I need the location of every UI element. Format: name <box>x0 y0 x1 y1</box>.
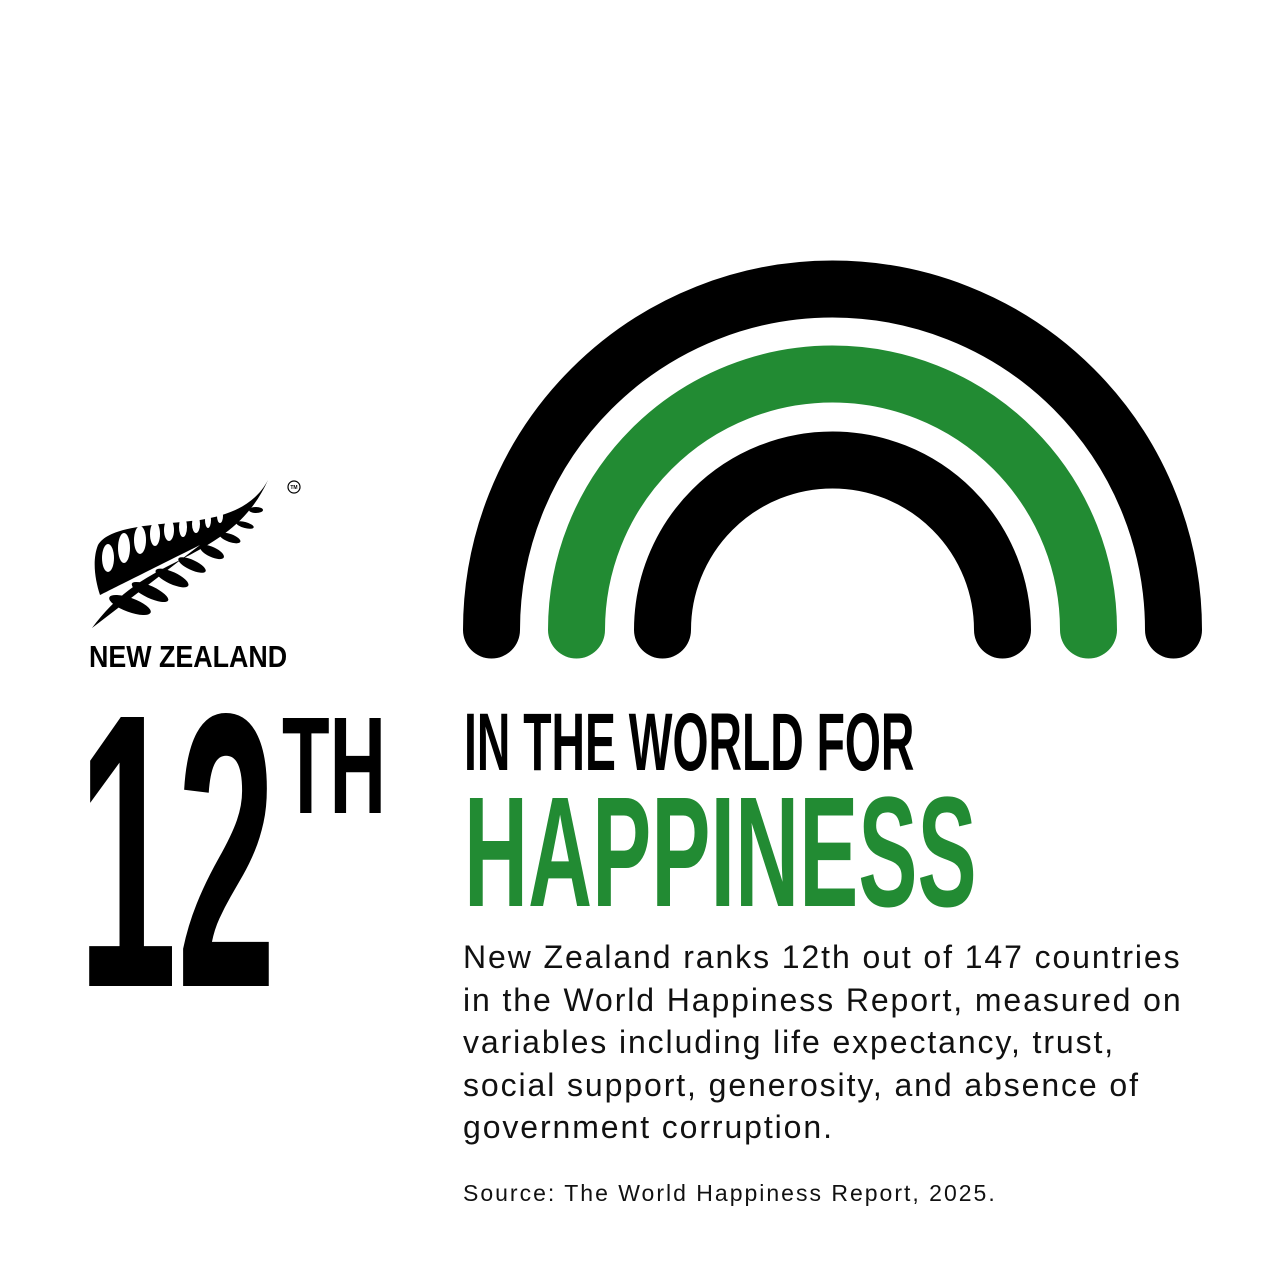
rainbow arcs <box>463 260 1202 658</box>
body text: government corruption. <box>463 1109 834 1145</box>
logo text: NEW ZEALAND <box>89 639 287 674</box>
body text: in the World Happiness Report, measured on <box>463 982 1183 1018</box>
body text: variables including life expectancy, trust, <box>463 1024 1115 1060</box>
big number 12: 12 <box>78 632 276 1069</box>
body text <box>463 939 1183 1145</box>
superscript TH: TH <box>282 689 386 843</box>
heading HAPPINESS: HAPPINESS <box>464 765 977 940</box>
body text: social support, generosity, and absence of <box>463 1066 1140 1102</box>
logo: silver fern <box>89 480 301 674</box>
source: Source: The World Happiness Report, 2025. <box>463 1180 997 1206</box>
body text: New Zealand ranks 12th out of 147 countries <box>463 939 1182 975</box>
logo: silver fern: TM <box>290 485 298 491</box>
heading line 1: IN THE WORLD FOR <box>464 697 914 788</box>
